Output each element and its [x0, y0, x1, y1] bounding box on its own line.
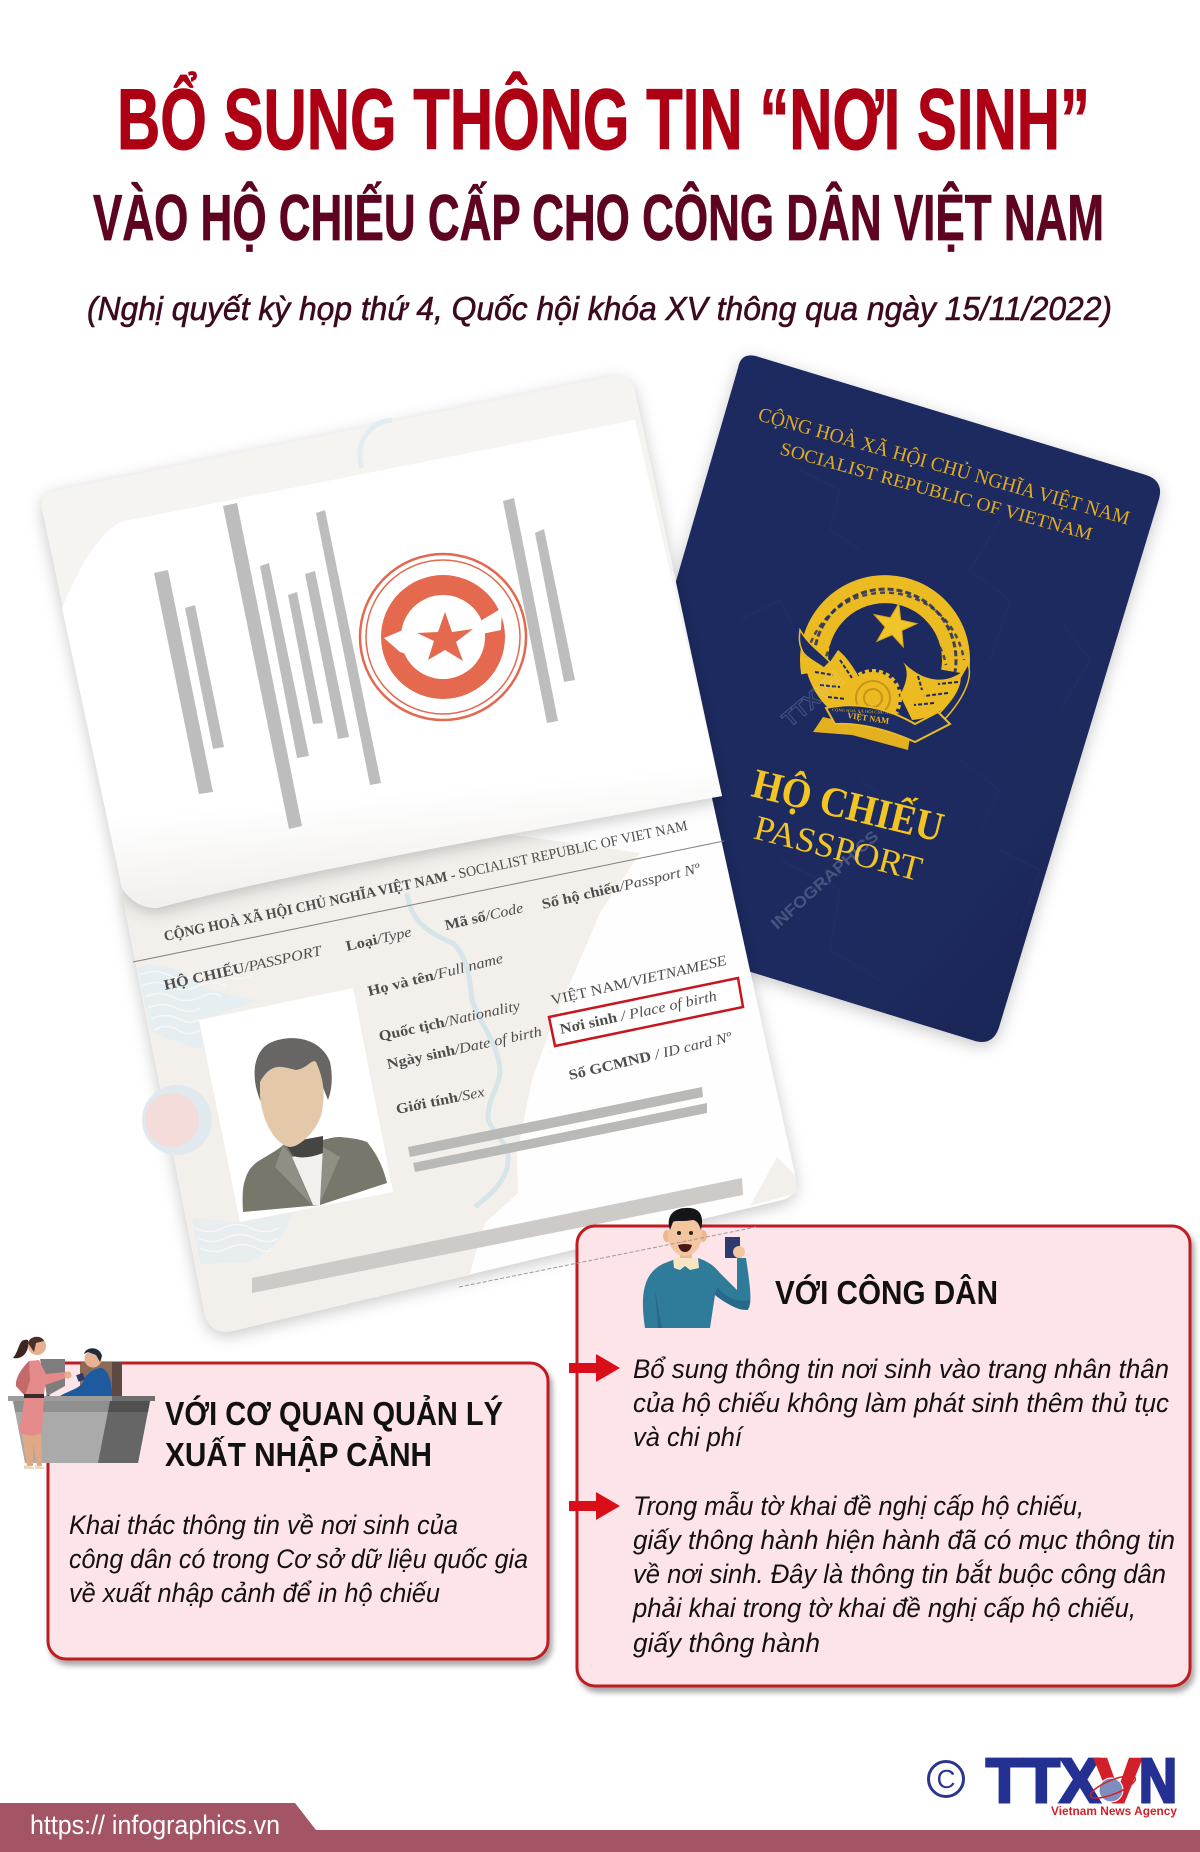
subtitle: (Nghị quyết kỳ họp thứ 4, Quốc hội khóa XV thông qua ngày 15/11/2022): [87, 290, 1112, 327]
redacted grey bars: [154, 498, 575, 829]
logo tagline: Vietnam News Agency: [1051, 1806, 1178, 1818]
watermarks: TTXVN: [777, 666, 848, 732]
copyright mark: [928, 1762, 964, 1796]
bullet 1 text: của hộ chiếu không làm phát sinh thêm thủ tục: [633, 1388, 1169, 1418]
stamp: [360, 554, 526, 720]
guilloche patch bottom: [192, 1212, 292, 1264]
arrow 1: [569, 1354, 620, 1382]
shirt and collar: [292, 1150, 323, 1205]
copyright mark: C: [937, 1764, 955, 1794]
bullet 2 text: về nơi sinh. Đây là thông tin bắt buộc công dân: [633, 1558, 1166, 1589]
emblem star: [869, 599, 920, 649]
bullet 2 text: phải khai trong tờ khai đề nghị cấp hộ chiếu,: [632, 1593, 1136, 1623]
page header: CỘNG HOÀ XÃ HỘI CHỦ NGHĨA VIỆT NAM - SOCIALIST REPUBLIC OF VIET NAM: [162, 816, 689, 945]
arrow 2: [569, 1492, 620, 1520]
panel heading: XUẤT NHẬP CẢNH: [165, 1436, 432, 1473]
field labels: Họ và tên /Full name: [366, 951, 505, 1000]
cover texture: [740, 470, 1090, 980]
grey data bars: [252, 1087, 743, 1293]
jacket: [243, 1137, 387, 1212]
footer url: https:// infographics.vn: [30, 1810, 280, 1840]
field labels: Ngày sinh /Date of birth: [385, 1024, 543, 1073]
emblem wheat and ribbons: [799, 630, 970, 727]
logo letters: [986, 1747, 1177, 1816]
cover heading: SOCIALIST REPUBLIC OF VIETNAM: [778, 440, 1094, 545]
logo TTXVN: [928, 1747, 1178, 1818]
header rule: [133, 841, 724, 962]
passport word: [748, 759, 948, 889]
field labels: Giới tính/Sex: [395, 1084, 487, 1118]
face: [260, 1061, 324, 1147]
passport cover: [578, 355, 1160, 1042]
emblem banner: [826, 705, 950, 742]
field labels: Mã số/Code: [443, 900, 525, 934]
panel text: về xuất nhập cảnh để in hộ chiếu: [69, 1578, 440, 1608]
page fold dashed line: [459, 1227, 756, 1287]
panel: immigration authority: [8, 1337, 548, 1659]
field labels: HỘ CHIẾU /PASSPORT: [162, 942, 324, 994]
title: [93, 72, 1104, 254]
bullet 1 text: Bổ sung thông tin nơi sinh vào trang nhân thân: [633, 1354, 1169, 1384]
river line: [407, 893, 508, 1207]
bullet 1 text: [633, 1354, 1169, 1452]
open passport pages: [42, 376, 797, 1332]
panel: citizens: [569, 1208, 1190, 1686]
emblem banner: CỘNG HOÀ XÃ HỘI CHỦ NGHĨA: [832, 707, 900, 716]
panel text: [69, 1510, 528, 1608]
icon: officers at desk: [8, 1337, 155, 1469]
bullet 2 text: giấy thông hành hiện hành đã có mục thông tin: [633, 1525, 1175, 1555]
field labels: Quốc tịch/Nationality: [377, 998, 522, 1045]
rosette: [142, 1085, 212, 1155]
field labels: Số GCMND / ID card Nº: [567, 1029, 734, 1084]
emblem gear: [846, 671, 900, 725]
right corner tint: [750, 1157, 797, 1206]
emblem wreath ring: [806, 589, 964, 672]
panel heading: VỚI CÔNG DÂN: [775, 1273, 998, 1311]
bullet 2 text: [632, 1491, 1175, 1658]
field labels: Loại/Type: [344, 924, 414, 955]
footer band: [0, 1803, 1200, 1852]
national emblem: [799, 589, 970, 750]
emblem base: [813, 717, 910, 750]
upper page: [42, 376, 722, 908]
logo letters: N: [1139, 1747, 1177, 1816]
emblem banner: VIỆT NAM: [847, 710, 890, 726]
upper page white panel: [62, 420, 722, 908]
logo letters: TTX: [986, 1747, 1100, 1816]
guilloche patch top: [137, 965, 262, 1050]
icon: citizen holding passport: [643, 1208, 750, 1328]
panel heading: [165, 1395, 503, 1473]
bullet 2 text: giấy thông hành: [633, 1628, 820, 1658]
field labels: VIỆT NAM /VIETNAMESE: [549, 952, 728, 1009]
watermarks: [768, 666, 883, 933]
panel heading: VỚI CƠ QUAN QUẢN LÝ: [165, 1395, 503, 1432]
field labels: Số hộ chiếu /Passport Nº: [540, 861, 702, 913]
bullet 2 text: Trong mẫu tờ khai đề nghị cấp hộ chiếu,: [633, 1491, 1084, 1521]
river tint: [360, 420, 392, 468]
passport word: PASSPORT: [750, 808, 926, 889]
logo globe: [1088, 1772, 1138, 1802]
passport word: HỘ CHIẾU: [748, 759, 948, 852]
panel text: công dân có trong Cơ sở dữ liệu quốc gia: [69, 1544, 528, 1574]
hair: [255, 1038, 332, 1104]
logo letters: V: [1095, 1747, 1141, 1816]
place of birth highlight: [549, 978, 743, 1046]
field labels: [162, 861, 734, 1118]
watermarks: INFOGRAPHICS: [768, 828, 883, 933]
panel text: Khai thác thông tin về nơi sinh của: [69, 1510, 458, 1540]
cover heading: CỘNG HOÀ XÃ HỘI CHỦ NGHĨA VIỆT NAM: [756, 402, 1133, 530]
lapels: [275, 1145, 312, 1205]
lower page: [122, 780, 797, 1332]
place of birth highlight: Nơi sinh / Place of birth: [558, 988, 718, 1038]
beige map area: [122, 830, 640, 1332]
bullet 1 text: và chi phí: [633, 1422, 744, 1452]
photo portrait: [199, 988, 393, 1222]
